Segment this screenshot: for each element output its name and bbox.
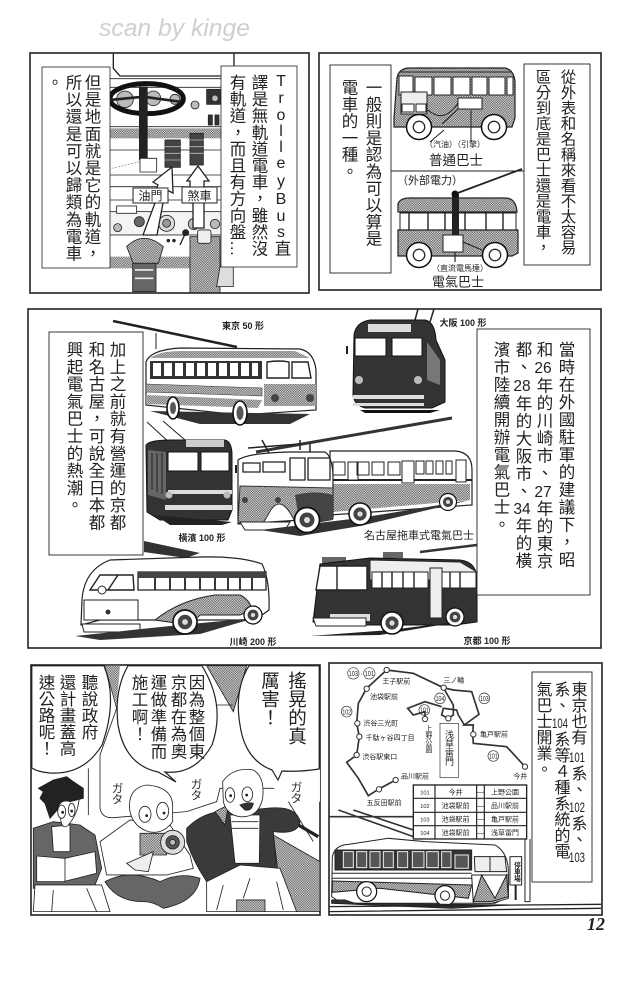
speech bubble: shaking badly: 搖晃的真 — [286, 671, 308, 745]
caption box: Showa 26 history: 34 — [513, 501, 531, 518]
panel: postwar trolley buses — [28, 309, 601, 648]
station labels: 池袋駅前 — [370, 692, 398, 701]
caption box: routes 101 to 104: 系等４種系統的電 — [552, 731, 570, 859]
speech bubble: Olympics preparation: 因為整個東 — [186, 674, 205, 760]
station labels: 上野公園 — [425, 724, 432, 754]
caption box: routes 101 to 104: 系、 — [568, 765, 586, 797]
caption box: routes 101 to 104: 104 — [552, 715, 568, 731]
label: brake: 煞車 — [187, 188, 212, 203]
panel: Tokyo trolley bus routes — [329, 663, 602, 915]
route table: 池袋駅前 — [442, 828, 470, 837]
label: Osaka 100: 大阪 100 形 — [439, 317, 487, 328]
caption box: Trolley Bus: 有軌道，而且有方向盤… — [227, 74, 246, 257]
illustration: bus dashboard — [109, 53, 234, 293]
caption box: routes 101 to 104: 103 — [569, 849, 585, 865]
caption box: Trolley Bus: y — [277, 173, 285, 190]
route numbers: · — [360, 669, 363, 678]
caption box: Showa 26 history: 年的東京 — [534, 500, 553, 570]
label: electric bus: 電氣巴士 — [432, 274, 484, 290]
speech bubble: highway plan: 還計畫蓋高 — [57, 674, 76, 758]
panel: bus vs trolley bus — [319, 53, 601, 290]
route numbers: 101 — [420, 706, 429, 715]
route table: 上野公園 — [491, 787, 519, 796]
speech bubble: highway plan: 速公路呢！ — [36, 674, 55, 756]
route table: — — [477, 830, 484, 837]
illustration: bus interior and passengers — [33, 666, 320, 912]
caption box: Showa 26 history: 28 — [513, 378, 531, 395]
route table: — — [477, 789, 484, 796]
terminal box: 浅草雷門 — [444, 729, 454, 767]
label: DC motor: （直流電馬達） — [432, 263, 488, 273]
route table — [413, 785, 527, 839]
caption box: generally a tram — [330, 65, 391, 273]
label: brake — [182, 187, 217, 203]
arrow: brake — [187, 166, 209, 228]
divider and overhead wire — [391, 169, 524, 194]
label: Tokyo 50: 東京 50 形 — [222, 320, 264, 331]
caption box: routes 101 to 104: 102 — [569, 799, 585, 815]
caption box: routes 101 to 104: 氣巴士開業。 — [534, 681, 552, 777]
route table: 104 — [420, 831, 430, 837]
middle passenger — [100, 820, 193, 875]
illustration: Nagoya trailer bus — [238, 418, 472, 536]
illustration: Yokohama 100 — [146, 421, 236, 525]
caption box: Trolley Bus: u — [277, 208, 285, 225]
caption box: ground is its track — [42, 67, 110, 268]
caption box: Trolley Bus: e — [277, 155, 286, 172]
caption box: Kyoto and Nagoya: 加上之前就有營運的京都 — [107, 341, 126, 531]
arrow: throttle — [143, 167, 173, 235]
label: gasoline and engine: （汽油）（引擎） — [425, 139, 485, 149]
route table: 品川駅前 — [491, 801, 519, 810]
label: Kyoto 100: 京都 100 形 — [463, 635, 511, 646]
station labels: 今井 — [513, 771, 527, 780]
route table: 亀戸駅前 — [491, 815, 519, 824]
speech bubble: Olympics preparation: 運做準備而 — [148, 674, 167, 760]
caption box: hard to tell — [524, 64, 590, 265]
label: Nagoya trailer bus: 名古屋拖車式電氣巴士 — [364, 528, 474, 542]
station labels: 亀戸駅前 — [480, 729, 508, 738]
caption box: Showa 26 history: 和 — [534, 341, 553, 358]
caption box: routes 101 to 104: 系、 — [568, 815, 586, 847]
caption box: Trolley Bus: 直 — [272, 240, 291, 256]
caption box: Trolley Bus: r — [278, 90, 284, 107]
route numbers: 102 — [342, 707, 351, 716]
illustration: Kawasaki 200 — [75, 541, 269, 640]
station labels — [362, 675, 527, 807]
sound effects: ガタ — [110, 782, 124, 805]
station labels: 千駄ヶ谷四丁目 — [366, 733, 415, 742]
panel: dashboard controls — [30, 53, 309, 293]
caption box: Showa 26 history — [477, 329, 590, 595]
caption box: generally a tram: 一般則是認為可以算是 — [363, 79, 382, 247]
speech bubble: shaking badly: 厲害！ — [260, 671, 280, 726]
caption box: hard to tell: 從外表和名稱來看不太容易 — [558, 69, 576, 256]
route table: 103 — [420, 818, 430, 824]
caption box: Trolley Bus: 譯是無軌道電車，雖然沒 — [249, 74, 268, 257]
right passenger — [187, 808, 300, 882]
caption box: routes 101 to 104: 101 — [569, 749, 585, 765]
caption box: Showa 26 history: 濱市陸續開辦電氣巴士。 — [491, 341, 510, 534]
route numbers: 103 — [480, 694, 489, 703]
illustration: Osaka 100 — [347, 309, 445, 413]
speech bubble: Olympics preparation: 施工啊！ — [129, 674, 148, 743]
station labels: 渋谷駅東口 — [362, 752, 397, 761]
station labels: 三ノ輪 — [443, 675, 464, 684]
caption box: Showa 26 history: 26 — [534, 360, 552, 377]
route table: 101 — [420, 790, 430, 796]
caption box: Trolley Bus: T — [276, 73, 286, 90]
caption box: Showa 26 history: 當時在外國駐軍的建議下，昭 — [556, 341, 575, 568]
caption box: ground is its track: 所以還是可以歸類為電車 — [63, 74, 82, 262]
caption box: Showa 26 history: 年的川崎市、 — [534, 377, 553, 482]
speech bubble: Olympics preparation — [117, 666, 217, 782]
illustration: ordinary bus — [394, 68, 515, 142]
panel: passengers on bus — [31, 665, 320, 915]
caption box: hard to tell: 區分到底是巴士還是電車， — [534, 69, 551, 255]
label: ordinary bus: 普通巴士 — [429, 153, 483, 168]
caption box: ground is its track: 。 — [44, 74, 62, 90]
route numbers: 103 — [349, 669, 358, 678]
route lines — [347, 670, 525, 796]
left passenger — [33, 822, 102, 888]
caption box: routes 101 to 104: 東京也有 — [568, 681, 588, 746]
route table: — — [477, 817, 484, 824]
caption box: Trolley Bus: l — [279, 123, 283, 140]
caption box: Trolley Bus — [221, 66, 297, 267]
caption box: Trolley Bus: l — [279, 139, 283, 156]
sound effects: ガタ — [289, 781, 303, 804]
caption box: Showa 26 history: 27 — [534, 484, 552, 501]
caption box: Showa 26 history: 年的大阪市、 — [513, 395, 532, 500]
caption box: Trolley Bus: o — [277, 107, 286, 124]
illustration: Tokyo 50 — [113, 321, 316, 425]
label: external power: （外部電力） — [397, 173, 463, 187]
caption box: Trolley Bus: s — [277, 224, 285, 241]
speech bubble: Olympics preparation: 京都在為奧 — [168, 674, 187, 760]
caption box: Trolley Bus: B — [276, 191, 286, 208]
caption box: routes 101 to 104: 系、 — [552, 681, 570, 713]
route numbers — [342, 669, 498, 761]
caption box: Kyoto and Nagoya: 和名古屋，可說全日本都 — [86, 341, 105, 531]
caption box: Showa 26 history: 都、 — [513, 341, 532, 376]
route numbers: 104 — [436, 694, 444, 703]
station labels: 五反田駅前 — [367, 798, 402, 807]
route numbers: 101 — [489, 752, 498, 761]
bus stop sign: 停車場 — [512, 861, 521, 883]
illustration: trolley bus at stop — [329, 838, 601, 912]
route table: 今井 — [449, 787, 463, 796]
illustration: electric bus — [398, 190, 518, 268]
caption box: generally a tram: 電車的一種。 — [339, 79, 358, 180]
label: Yokohama 100: 橫濱 100 形 — [178, 532, 226, 543]
watermark: scan by kinge — [99, 15, 250, 42]
terminal box — [440, 723, 458, 778]
page number: 12 — [587, 914, 605, 934]
route table: 池袋駅前 — [442, 801, 470, 810]
route map — [329, 667, 601, 912]
caption box: routes 101 to 104 — [532, 672, 592, 882]
caption box: ground is its track: 但是地面就是它的軌道， — [82, 74, 101, 262]
route table: 池袋駅前 — [442, 815, 470, 824]
station labels: 王子駅前 — [382, 676, 410, 685]
speech bubble: shaking badly — [238, 666, 319, 780]
caption box: Kyoto and Nagoya: 興起電氣巴士的熱潮。 — [64, 341, 83, 514]
caption box: Kyoto and Nagoya — [49, 332, 143, 555]
route numbers: 101 — [365, 669, 374, 678]
station labels: 渋谷三光町 — [363, 719, 398, 728]
route table: 102 — [420, 804, 430, 810]
label: throttle — [133, 188, 168, 203]
route table: — — [477, 803, 484, 810]
route stops — [354, 667, 528, 792]
illustration: Kyoto 100 — [310, 545, 477, 636]
speech bubble: highway plan — [32, 666, 111, 773]
station labels: 品川駅前 — [401, 771, 429, 780]
speech bubble: highway plan: 聽說政府 — [79, 674, 98, 741]
label: Kawasaki 200: 川崎 200 形 — [229, 636, 277, 647]
sound effects — [110, 778, 303, 805]
sound effects: ガタ — [189, 778, 203, 801]
route table: 浅草雷門 — [491, 828, 519, 837]
caption box: Showa 26 history: 年的橫 — [513, 517, 532, 570]
overhead wires — [329, 810, 413, 837]
label: throttle: 油門 — [138, 189, 163, 203]
